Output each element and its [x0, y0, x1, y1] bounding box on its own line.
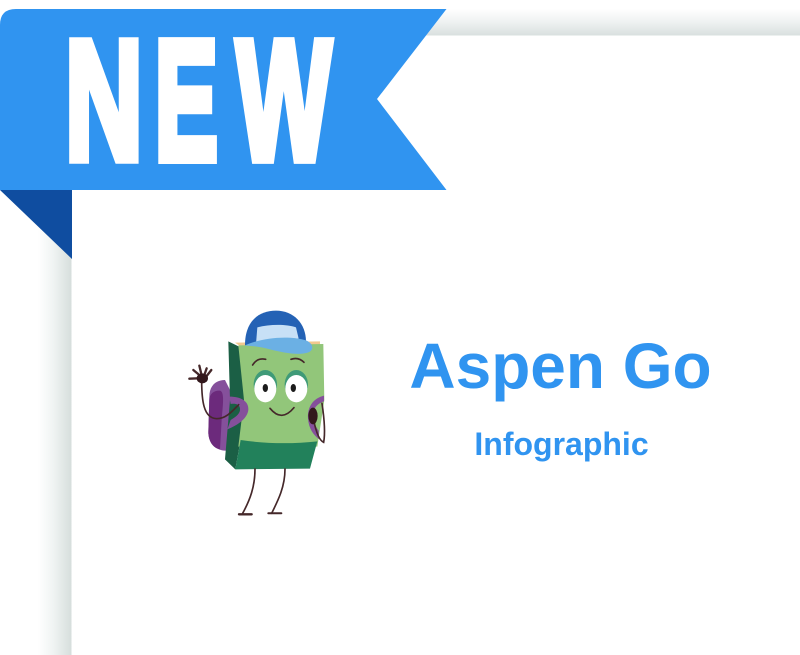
- icon: book mascot with backpack and cap: [189, 311, 324, 514]
- backpack strap: [227, 397, 248, 429]
- title: Aspen Go: [409, 330, 712, 402]
- right eye: [285, 370, 308, 402]
- limbs: [189, 366, 324, 514]
- ribbon text: NEW: [65, 6, 331, 196]
- book bottom band: [235, 440, 317, 469]
- book pages edge: [235, 341, 320, 348]
- new ribbon: [0, 6, 446, 196]
- resting hand: [308, 408, 318, 424]
- face lines: [253, 358, 304, 415]
- cap: [245, 311, 312, 354]
- ribbon text: NEW: W: [236, 6, 331, 196]
- right strap: [308, 396, 324, 439]
- backpack: [208, 380, 233, 451]
- ribbon fold: [0, 190, 72, 259]
- ribbon text: NEW: E: [155, 6, 218, 196]
- top page edge shadow: [425, 9, 800, 36]
- ribbon text: NEW: N: [65, 6, 143, 196]
- book cover: [238, 344, 324, 447]
- book spine: [225, 341, 245, 469]
- waving hand: [197, 373, 208, 383]
- subtitle: Infographic: [474, 426, 649, 462]
- left eye: [254, 370, 277, 402]
- left page edge shadow: [38, 190, 72, 655]
